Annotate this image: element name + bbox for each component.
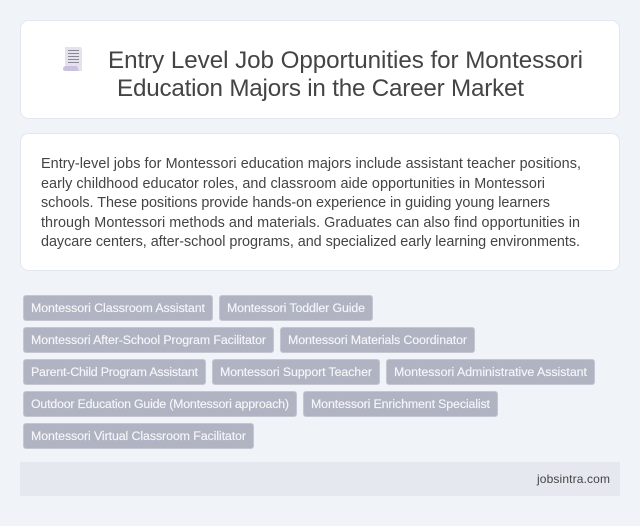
tag: Montessori Classroom Assistant: Montessori Classroom Assistant xyxy=(31,301,206,315)
description text: Entry-level jobs for Montessori education majors include assistant teacher positions, xyxy=(41,156,581,172)
tag: Montessori After-School Program Facilitator: Montessori After-School Program Facilitator xyxy=(31,333,266,347)
tag: Montessori Toddler Guide: Montessori Toddler Guide xyxy=(227,301,365,315)
panel: description xyxy=(20,134,620,270)
tag: Montessori Enrichment Specialist: Montessori Enrichment Specialist xyxy=(311,397,491,411)
description text: schools. These positions provide hands-on experience in guiding young learners xyxy=(41,195,550,211)
tag: Montessori Support Teacher: Montessori Support Teacher xyxy=(220,365,372,379)
tag: Montessori Administrative Assistant xyxy=(386,360,594,384)
tag: Montessori Support Teacher xyxy=(212,360,380,384)
heading line 2: Education Majors in the Career Market xyxy=(117,75,524,102)
icon: document scroll xyxy=(63,47,82,71)
tag: Montessori Enrichment Specialist xyxy=(304,392,498,416)
tag: Montessori Materials Coordinator xyxy=(280,328,474,352)
tag: Outdoor Education Guide (Montessori approach) xyxy=(24,392,296,416)
footer source text: jobsintra.com xyxy=(536,472,610,486)
tag list xyxy=(24,296,594,448)
description text: through Montessori methods and materials. Graduates can also find opportunities in xyxy=(41,215,580,231)
description text xyxy=(41,156,581,250)
tag: Montessori After-School Program Facilitator xyxy=(24,328,274,352)
tag: Montessori Virtual Classroom Facilitator: Montessori Virtual Classroom Facilitator xyxy=(31,429,246,443)
footer xyxy=(20,462,620,496)
tag: Montessori Virtual Classroom Facilitator xyxy=(24,424,254,448)
tag: Montessori Classroom Assistant xyxy=(24,296,212,320)
tag: Parent-Child Program Assistant: Parent-Child Program Assistant xyxy=(31,365,199,379)
tag: Parent-Child Program Assistant xyxy=(24,360,206,384)
tag: Montessori Administrative Assistant: Montessori Administrative Assistant xyxy=(394,365,588,379)
tag: Montessori Materials Coordinator: Montessori Materials Coordinator xyxy=(288,333,467,347)
description text: daycare centers, after-school programs, and specialized early learning environments. xyxy=(41,234,580,250)
tag: Montessori Toddler Guide xyxy=(220,296,372,320)
description text: early childhood educator roles, and classroom aide opportunities in Montessori xyxy=(41,176,545,192)
panel: title xyxy=(20,20,620,118)
heading line 1: Entry Level Job Opportunities for Montessori xyxy=(108,47,583,74)
tag: Outdoor Education Guide (Montessori approach): Outdoor Education Guide (Montessori approach) xyxy=(31,397,289,411)
